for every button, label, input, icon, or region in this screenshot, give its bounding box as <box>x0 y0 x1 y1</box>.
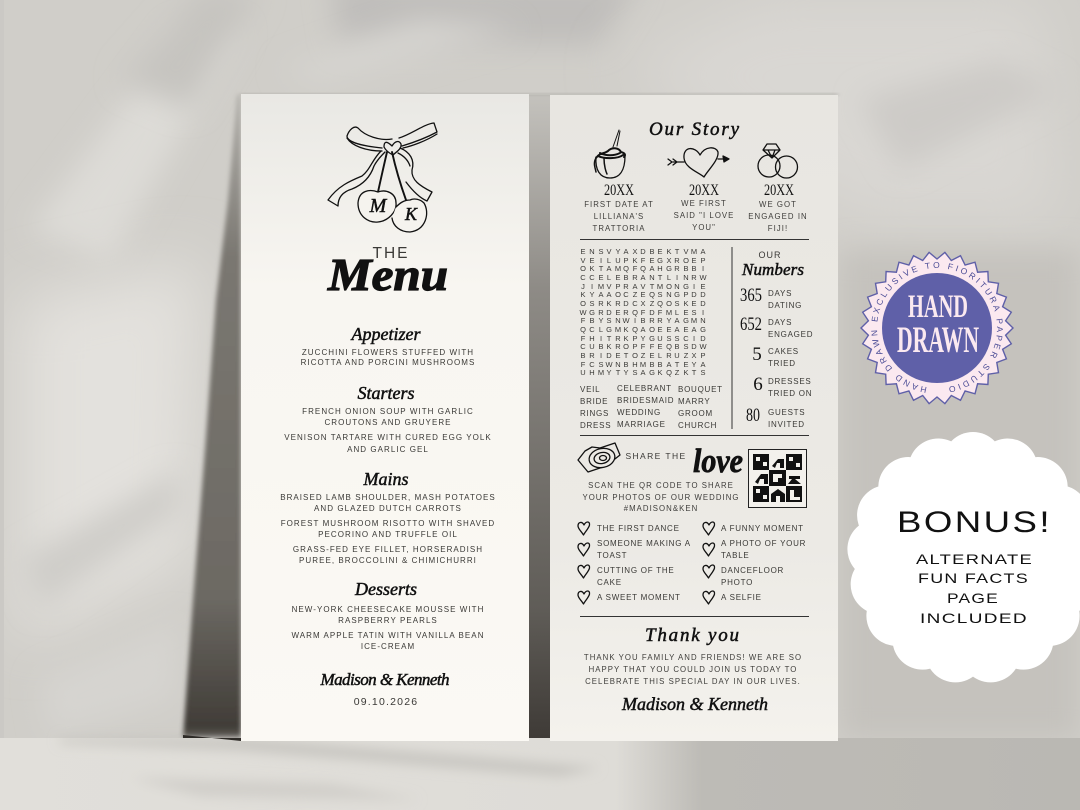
section: mains: PUREE, BROCCOLINI & CHIMICHURRI <box>299 556 477 565</box>
our numbers: ENGAGED <box>768 330 813 339</box>
photo checklist: TOAST <box>597 551 627 560</box>
our numbers: TRIED <box>768 359 796 368</box>
section: desserts: RASPBERRY PEARLS <box>338 616 438 625</box>
icon: noodle bowl <box>594 130 625 178</box>
story: first said i love you: 20XX <box>689 182 719 199</box>
photo checklist: THE FIRST DANCE <box>597 524 680 533</box>
section: desserts: ICE-CREAM <box>361 642 415 651</box>
word list: MARRIAGE <box>617 420 666 429</box>
signature and date <box>320 670 450 708</box>
heading: share the love: love <box>693 443 743 480</box>
story: got engaged: FIJI! <box>768 224 788 233</box>
photo checklist: CAKE <box>597 578 622 587</box>
section: mains: Mains <box>362 469 408 489</box>
section: starters: VENISON TARTARE WITH CURED EGG YOLK <box>284 433 492 442</box>
word search grid: OKTAMQFQAHGRBBI <box>580 264 704 273</box>
word search grid: KYAAOCZEQSNGPDD <box>580 290 706 299</box>
panel: story card <box>550 95 838 741</box>
icon: wedding rings <box>758 144 798 178</box>
scan instructions: YOUR PHOTOS OF OUR WEDDING <box>582 493 740 502</box>
our numbers: TRIED ON <box>768 389 812 398</box>
story: first date <box>584 182 654 233</box>
our numbers: 5 <box>752 344 762 365</box>
word search grid: VEILUPKFEGXROEP <box>580 256 706 265</box>
photo checklist: A FUNNY MOMENT <box>721 524 804 533</box>
our numbers: DRESSES <box>768 377 811 386</box>
section: mains: BRAISED LAMB SHOULDER, MASH POTATOES <box>280 493 496 502</box>
story: first date: FIRST DATE AT <box>584 200 654 209</box>
word search grid: CCELEBRANTLINRW <box>580 273 707 282</box>
section: appetizer: RICOTTA AND PORCINI MUSHROOMS <box>301 358 475 367</box>
section: starters: FRENCH ONION SOUP WITH GARLIC <box>302 407 474 416</box>
word list: RINGS <box>580 409 609 418</box>
callout: bonus: BONUS! <box>897 506 1052 539</box>
word search grid: ENSVYAXDBEKTVMA <box>580 247 706 256</box>
section: desserts: NEW-YORK CHEESECAKE MOUSSE WITH <box>292 605 484 614</box>
section: appetizer: ZUCCHINI FLOWERS STUFFED WITH <box>302 348 474 357</box>
our numbers <box>740 250 813 429</box>
our numbers: 6 <box>753 374 763 395</box>
story: first date: 20XX <box>604 182 634 199</box>
story: got engaged: ENGAGED IN <box>748 212 808 221</box>
monogram initials: K <box>404 204 418 224</box>
our numbers: 652 <box>740 314 762 335</box>
illustration: bow with cherries <box>328 123 437 232</box>
word list: DRESS <box>580 421 611 430</box>
section: starters: CROUTONS AND GRUYERE <box>324 418 452 427</box>
badge: hand drawn: HAND <box>908 289 968 325</box>
section: mains <box>280 469 496 565</box>
story: first date: TRATTORIA <box>593 224 645 233</box>
story: first said i love you: SAID "I LOVE <box>674 211 734 220</box>
thank you message: HAPPY THAT YOU COULD JOIN US TODAY TO <box>589 665 797 674</box>
section: appetizer: Appetizer <box>350 324 421 344</box>
badge: hand drawn: HAND DRAWN EXCLUSIVE TO FIORITURA PAPER STUDIO <box>871 262 1003 393</box>
section: appetizer <box>301 324 475 367</box>
panel: menu card <box>241 94 529 741</box>
word search grid: FBYSNWIBRRYAGMN <box>581 316 706 325</box>
callout: bonus: ALTERNATE <box>916 551 1033 567</box>
word list: BRIDE <box>580 397 608 406</box>
photo checklist: TABLE <box>721 551 750 560</box>
word search grid: UHMYTYSAGKQZKTS <box>580 368 706 377</box>
our numbers: OUR <box>758 250 782 260</box>
our numbers: CAKES <box>768 347 799 356</box>
thank you message <box>584 653 802 686</box>
our numbers: DAYS <box>768 318 792 327</box>
section: mains: PECORINO AND TRUFFLE OIL <box>318 530 458 539</box>
section: starters <box>284 383 492 454</box>
icon: camera <box>578 443 620 472</box>
thank you message: CELEBRATE THIS SPECIAL DAY IN OUR LIVES. <box>585 677 801 686</box>
word list: GROOM <box>678 409 713 418</box>
badge: hand drawn: DRAWN <box>897 320 979 361</box>
word search grid <box>579 247 707 377</box>
word search grid: QCLGMKQAOEEAEAG <box>580 325 706 334</box>
photo checklist: A PHOTO OF YOUR <box>721 539 806 548</box>
word search grid: OSRKRDCXZQOSKED <box>580 299 706 308</box>
our numbers: DATING <box>768 301 802 310</box>
photo checklist <box>578 522 806 604</box>
word search grid: WGRDERQFDFMLESI <box>579 308 704 317</box>
title: the menu: Menu <box>327 249 448 300</box>
photo checklist: A SWEET MOMENT <box>597 593 681 602</box>
story: first said i love you <box>674 182 734 232</box>
our numbers: GUESTS <box>768 408 805 417</box>
word list: CHURCH <box>678 421 717 430</box>
photo checklist: DANCEFLOOR <box>721 566 784 575</box>
section: desserts: WARM APPLE TATIN WITH VANILLA BEAN <box>291 631 485 640</box>
story: got engaged: WE GOT <box>759 200 797 209</box>
word list: VEIL <box>580 385 600 394</box>
photo checklist: SOMEONE MAKING A <box>597 539 691 548</box>
our numbers: INVITED <box>768 420 805 429</box>
signature and date: 09.10.2026 <box>354 696 418 708</box>
word list: WEDDING <box>617 408 661 417</box>
word search grid: JIMVPRAVTMONGIE <box>581 282 706 291</box>
scan instructions: SCAN THE QR CODE TO SHARE <box>588 481 734 490</box>
callout: bonus <box>844 430 1080 687</box>
our numbers: 365 <box>740 285 762 306</box>
word list: BOUQUET <box>678 385 723 394</box>
signature: Madison & Kenneth <box>621 694 768 714</box>
word search grid: FHITRKPYGUSSCID <box>581 334 706 343</box>
word search grid: FCSWNBHMBBATEYA <box>581 360 706 369</box>
our numbers: Numbers <box>741 260 804 279</box>
section: mains: AND GLAZED DUTCH CARROTS <box>314 504 462 513</box>
callout: bonus: INCLUDED <box>920 610 1028 626</box>
monogram initials: M <box>369 195 388 217</box>
scan instructions: #MADISON&KEN <box>624 504 698 513</box>
thank you message: THANK YOU FAMILY AND FRIENDS! WE ARE SO <box>584 653 802 662</box>
word search grid: BRIDETOZELRUZXP <box>580 351 706 360</box>
qr code <box>748 450 806 508</box>
heading: our story: Our Story <box>649 119 740 140</box>
callout: bonus: PAGE <box>947 590 999 606</box>
our numbers: DAYS <box>768 289 792 298</box>
story: got engaged: 20XX <box>764 182 794 199</box>
callout: bonus: FUN FACTS <box>918 570 1029 586</box>
word list: BRIDESMAID <box>617 396 674 405</box>
word list: MARRY <box>678 397 710 406</box>
heading: share the love: SHARE THE <box>625 451 687 461</box>
story: first said i love you: YOU" <box>692 223 716 232</box>
word list <box>580 384 723 430</box>
photo checklist: CUTTING OF THE <box>597 566 674 575</box>
story: first date: LILLIANA'S <box>594 212 644 221</box>
photo checklist: A SELFIE <box>721 593 762 602</box>
section: starters: AND GARLIC GEL <box>347 445 429 454</box>
monogram initials <box>369 195 418 224</box>
word search grid: CUBKROPFFEQBSDW <box>580 342 707 351</box>
our numbers: 80 <box>746 405 760 426</box>
title: the menu: THE <box>372 245 410 262</box>
word list: CELEBRANT <box>617 384 672 393</box>
signature and date: Madison & Kenneth <box>320 670 450 689</box>
section: mains: GRASS-FED EYE FILLET, HORSERADISH <box>293 545 483 554</box>
photo checklist: PHOTO <box>721 578 753 587</box>
story: got engaged <box>748 182 808 233</box>
story: first said i love you: WE FIRST <box>681 199 727 208</box>
section: starters: Starters <box>357 383 415 403</box>
scan instructions <box>582 481 740 513</box>
section: mains: FOREST MUSHROOM RISOTTO WITH SHAVED <box>281 519 495 528</box>
heading: share the love <box>625 443 743 480</box>
heading: thank you: Thank you <box>645 625 739 646</box>
icon: heart with arrow <box>668 148 729 177</box>
section: desserts: Desserts <box>354 579 417 599</box>
section: desserts <box>291 579 485 651</box>
